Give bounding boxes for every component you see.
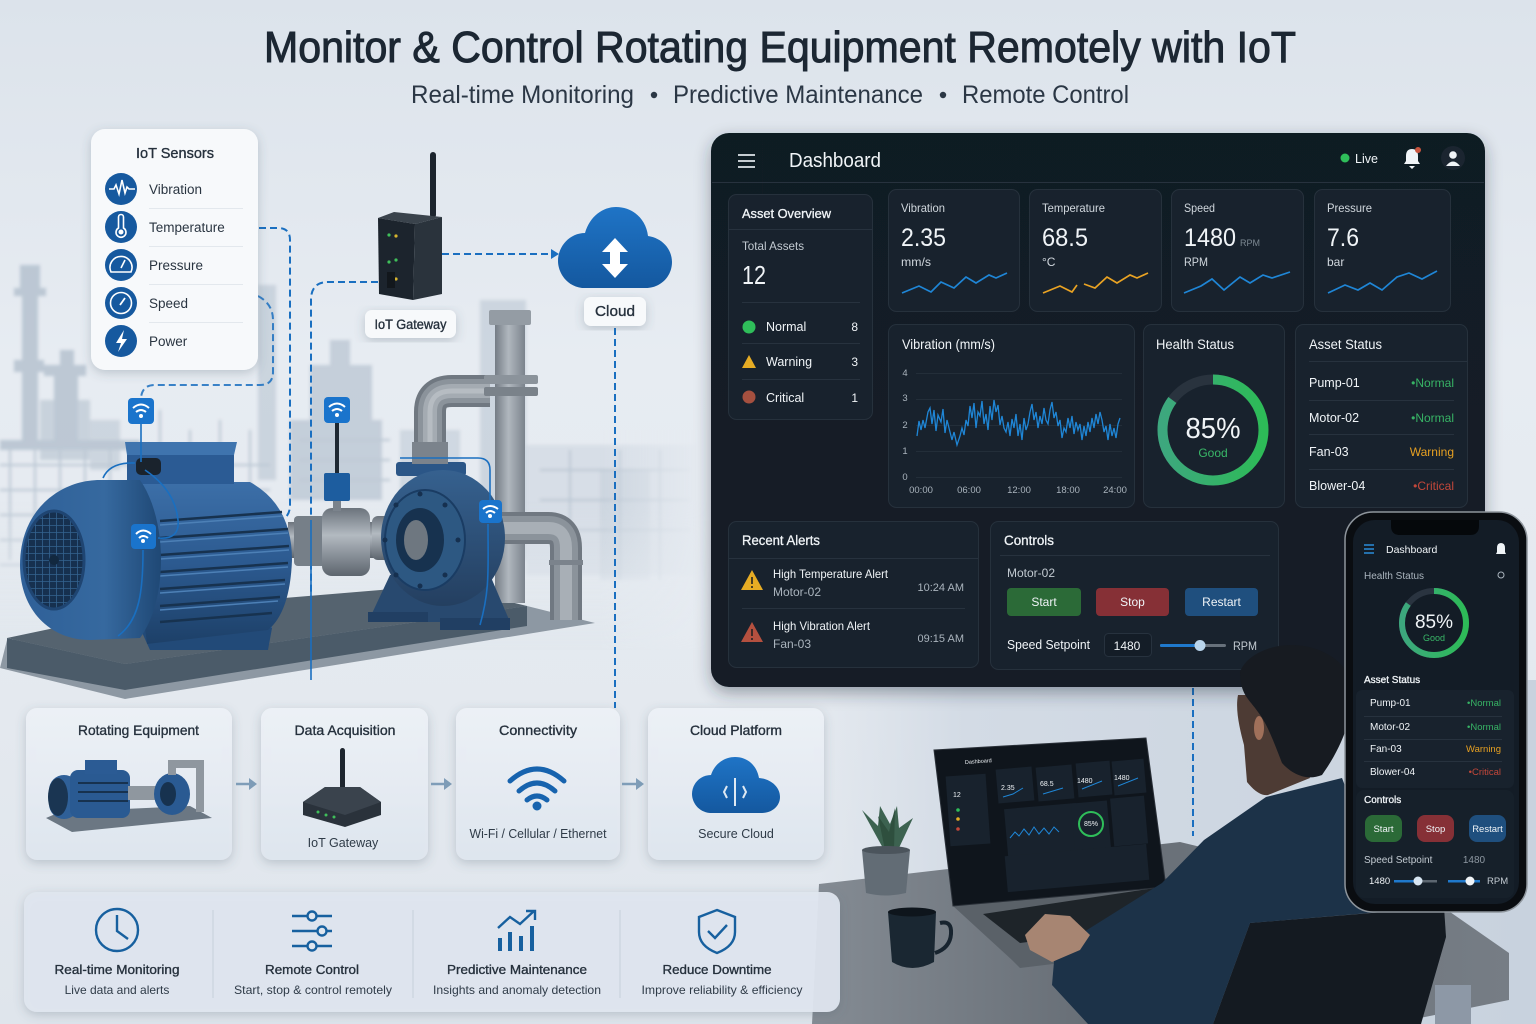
button: stop bbox=[1096, 588, 1169, 616]
phone controls: Speed Setpoint bbox=[1364, 855, 1433, 866]
card: asset overview: Asset Overview bbox=[742, 207, 832, 221]
metric card: vibration bbox=[888, 190, 1020, 312]
laptop screen dashboard bbox=[946, 758, 1149, 892]
button: restart: Restart bbox=[1202, 595, 1242, 609]
plant bbox=[862, 806, 913, 896]
metric card: speed: Speed bbox=[1184, 201, 1215, 215]
panel: benefits bbox=[24, 892, 840, 1012]
centrifugal pump bbox=[368, 442, 510, 630]
chair bbox=[1213, 907, 1446, 1024]
metric card: temperature bbox=[1030, 190, 1162, 312]
phone header: Dashboard bbox=[1386, 544, 1438, 556]
benefit: real-time monitoring: Real-time Monitoring bbox=[54, 962, 180, 977]
card: asset status: •Normal bbox=[1411, 376, 1454, 390]
label: cloud bbox=[584, 297, 646, 326]
title: Monitor & Control Rotating Equipment Remotely with IoT bbox=[264, 23, 1296, 72]
card: health status gauge bbox=[1144, 324, 1284, 508]
hand bbox=[1025, 914, 1090, 962]
chart: vibration time series: 24:00 bbox=[1103, 485, 1127, 496]
chart: vibration time series: 3 bbox=[902, 393, 908, 404]
chart: vibration time series: 12:00 bbox=[1007, 485, 1031, 496]
face and neck bbox=[1237, 695, 1310, 795]
phone asset status: Fan-03 bbox=[1370, 744, 1402, 755]
label: IoT gateway bbox=[365, 310, 456, 338]
card: recent alerts: 09:15 AM bbox=[918, 633, 964, 645]
benefit: remote control bbox=[234, 912, 392, 997]
card: recent alerts: High Vibration Alert bbox=[773, 619, 871, 633]
card: recent alerts: High Temperature Alert bbox=[773, 567, 889, 581]
card: asset overview bbox=[728, 194, 872, 420]
phone bbox=[1345, 512, 1527, 912]
card: recent alerts: 10:24 AM bbox=[918, 582, 964, 594]
subtitle: Remote Control bbox=[962, 81, 1129, 109]
card: recent alerts: Motor-02 bbox=[773, 585, 821, 599]
desk bbox=[812, 842, 1509, 1024]
phone controls: Start bbox=[1373, 824, 1394, 835]
icon: IoT gateway device bbox=[378, 152, 442, 300]
desk scene bbox=[934, 645, 1446, 1024]
shirt bbox=[1052, 778, 1440, 1024]
chart: vibration time series: 4 bbox=[902, 368, 908, 379]
laptop screen dashboard: 2.35 bbox=[1001, 785, 1015, 792]
button: stop: Stop bbox=[1120, 595, 1145, 609]
card: controls: Motor-02 bbox=[1007, 566, 1055, 580]
phone controls: Controls bbox=[1364, 795, 1401, 806]
icon: wifi bbox=[510, 769, 564, 808]
sensor: power: Power bbox=[149, 334, 188, 349]
equipment: motor and pump assembly bbox=[0, 310, 595, 699]
laptop screen dashboard: Dashboard bbox=[965, 758, 992, 766]
dashboard header bbox=[712, 146, 1484, 182]
phone health gauge: Good bbox=[1423, 633, 1445, 643]
flow card: connectivity bbox=[456, 708, 620, 860]
flow card: cloud platform bbox=[648, 708, 824, 860]
button: start bbox=[1007, 588, 1081, 616]
sensor wiring bbox=[103, 422, 490, 680]
flow card: cloud platform: Cloud Platform bbox=[690, 722, 782, 738]
phone header bbox=[1364, 543, 1506, 556]
benefit: remote control: Remote Control bbox=[265, 962, 359, 977]
icon: mini motor pump bbox=[46, 760, 212, 832]
card: asset overview: Critical bbox=[766, 391, 804, 405]
flow card: data acquisition: IoT Gateway bbox=[308, 836, 379, 850]
card: asset status: Blower-04 bbox=[1309, 479, 1365, 493]
phone asset status: Motor-02 bbox=[1370, 722, 1410, 733]
benefit: reduce downtime: Reduce Downtime bbox=[662, 962, 772, 977]
card: controls: Controls bbox=[1004, 533, 1054, 548]
benefit: predictive maintenance bbox=[433, 911, 601, 997]
chart: vibration time series: 2 bbox=[902, 420, 908, 431]
metric card: pressure: bar bbox=[1327, 255, 1344, 269]
laptop bbox=[934, 738, 1170, 968]
label: cloud: Cloud bbox=[595, 303, 635, 320]
connectors: sensors to equipment and cloud bbox=[141, 228, 1345, 836]
benefit: reduce downtime: Improve reliability & efficiency bbox=[642, 983, 802, 997]
ear bbox=[1254, 716, 1264, 740]
card: health status gauge: Good bbox=[1198, 446, 1228, 460]
laptop screen dashboard: 85% bbox=[1084, 821, 1098, 828]
card: asset status: Warning bbox=[1410, 445, 1454, 459]
card: asset overview: 8 bbox=[851, 320, 858, 334]
chart: vibration time series bbox=[888, 324, 1134, 508]
card: asset overview: 12 bbox=[742, 260, 766, 290]
icon: secure cloud bbox=[692, 757, 780, 813]
button: start: Start bbox=[1031, 595, 1057, 609]
icon: router bbox=[303, 748, 381, 827]
shaft coupling bbox=[288, 508, 413, 576]
card: asset overview: Total Assets bbox=[742, 239, 804, 253]
phone health gauge: Health Status bbox=[1364, 571, 1424, 582]
chart: vibration time series: 1 bbox=[902, 446, 908, 457]
metric card: speed: 1480 bbox=[1184, 224, 1236, 252]
sensor: pressure bbox=[105, 249, 203, 281]
phone controls: Restart bbox=[1472, 824, 1503, 835]
icon: wifi sensor 2 bbox=[324, 397, 350, 423]
icon: cloud bbox=[558, 207, 672, 288]
phone health gauge bbox=[1364, 571, 1504, 655]
phone controls: Stop bbox=[1426, 824, 1445, 835]
chart: vibration time series: 00:00 bbox=[909, 485, 933, 496]
dashboard header: Dashboard bbox=[789, 150, 881, 172]
flow card: rotating equipment: Rotating Equipment bbox=[78, 722, 199, 738]
sensor: pressure: Pressure bbox=[149, 258, 203, 273]
phone asset status: •Normal bbox=[1467, 698, 1501, 709]
phone controls: 1480 bbox=[1369, 876, 1390, 887]
laptop screen dashboard: 1480 bbox=[1077, 778, 1093, 785]
flow card: rotating equipment bbox=[26, 708, 232, 860]
metric card: pressure: Pressure bbox=[1327, 201, 1372, 215]
chart: vibration time series: Vibration (mm/s) bbox=[902, 336, 995, 352]
chart: vibration time series: 06:00 bbox=[957, 485, 981, 496]
benefit: real-time monitoring: Live data and alerts bbox=[65, 983, 169, 997]
phone asset status: Warning bbox=[1466, 744, 1501, 755]
phone controls bbox=[1356, 790, 1514, 898]
metric card: pressure bbox=[1314, 190, 1450, 312]
sensor: vibration bbox=[105, 173, 202, 205]
arrow: connectivity to cloud bbox=[622, 778, 644, 790]
subtitle: Predictive Maintenance bbox=[673, 81, 923, 109]
card: asset overview: 3 bbox=[851, 355, 858, 369]
base plate bbox=[0, 585, 595, 699]
fog over refinery bbox=[0, 500, 820, 650]
card: asset status bbox=[1296, 324, 1468, 508]
dashboard header: Live bbox=[1355, 151, 1378, 166]
chart: vibration time series: 0 bbox=[902, 472, 908, 483]
laptop screen dashboard: 12 bbox=[953, 792, 961, 799]
laptop screen dashboard: 68.5 bbox=[1040, 781, 1054, 788]
phone controls: 1480 bbox=[1463, 855, 1486, 866]
arrow: equipment to acquisition bbox=[236, 778, 257, 790]
sensor: power bbox=[105, 325, 188, 357]
fog to the right of refinery bbox=[600, 430, 710, 650]
card: asset overview: Warning bbox=[766, 355, 812, 369]
laptop screen dashboard: 1480 bbox=[1114, 775, 1130, 782]
phone notch bbox=[1391, 520, 1479, 535]
card: controls: 1480 bbox=[1114, 639, 1141, 653]
card: asset status: Pump-01 bbox=[1309, 376, 1360, 390]
metric card: speed bbox=[1172, 190, 1304, 312]
benefit: remote control: Start, stop & control remotely bbox=[234, 983, 392, 997]
card: asset overview: 1 bbox=[851, 391, 858, 405]
vibration probe bbox=[324, 420, 350, 511]
phone controls: RPM bbox=[1487, 876, 1508, 887]
icon: wifi sensor 4 bbox=[479, 500, 502, 523]
phone asset status: Pump-01 bbox=[1370, 698, 1411, 709]
label: IoT gateway: IoT Gateway bbox=[374, 317, 447, 332]
metric card: vibration: mm/s bbox=[901, 255, 931, 269]
flow card: data acquisition: Data Acquisition bbox=[294, 722, 396, 738]
metric card: temperature: °C bbox=[1042, 255, 1056, 269]
flow card: data acquisition bbox=[261, 708, 428, 860]
card: controls: Speed Setpoint bbox=[1007, 637, 1090, 652]
card: health status gauge: 85% bbox=[1186, 413, 1240, 445]
flow card: cloud platform: Secure Cloud bbox=[698, 827, 774, 841]
panel: IoT sensors: IoT Sensors bbox=[136, 145, 214, 162]
benefit: reduce downtime bbox=[642, 910, 802, 997]
mug bbox=[888, 908, 951, 968]
card: health status gauge: Health Status bbox=[1156, 337, 1234, 352]
metric card: temperature: 68.5 bbox=[1042, 224, 1088, 252]
metric card: temperature: Temperature bbox=[1042, 201, 1105, 215]
discharge pipework bbox=[430, 310, 583, 620]
card: asset status: •Critical bbox=[1413, 479, 1454, 493]
icon: wifi sensor 3 bbox=[131, 524, 156, 549]
card: asset overview: Normal bbox=[766, 320, 806, 334]
card: asset status: Fan-03 bbox=[1309, 445, 1349, 459]
hair bbox=[1240, 645, 1353, 777]
flow card: connectivity: Connectivity bbox=[499, 722, 577, 738]
card: recent alerts: Recent Alerts bbox=[742, 533, 820, 548]
sensor: speed: Speed bbox=[149, 296, 188, 311]
benefit: predictive maintenance: Insights and anomaly detection bbox=[433, 983, 601, 997]
card: asset status: Asset Status bbox=[1309, 337, 1382, 352]
phone asset status: •Critical bbox=[1469, 767, 1501, 778]
sensor: speed bbox=[105, 287, 188, 319]
desk leg bbox=[1435, 985, 1471, 1024]
metric card: vibration: 2.35 bbox=[901, 224, 946, 252]
sensor: temperature bbox=[105, 211, 225, 243]
phone asset status bbox=[1356, 675, 1514, 788]
subtitle: Real-time Monitoring bbox=[411, 81, 634, 109]
panel: dashboard bbox=[711, 133, 1485, 687]
arrow: acquisition to connectivity bbox=[431, 778, 452, 790]
phone asset status: •Normal bbox=[1467, 722, 1501, 733]
electric motor bbox=[20, 442, 292, 650]
metric card: speed: RPM bbox=[1184, 255, 1208, 269]
panel: IoT sensors bbox=[91, 129, 258, 370]
card: asset status: Motor-02 bbox=[1309, 411, 1359, 425]
phone asset status: Blower-04 bbox=[1370, 767, 1415, 778]
sensor: vibration: Vibration bbox=[149, 182, 202, 197]
card: controls: RPM bbox=[1233, 639, 1257, 653]
benefit: predictive maintenance: Predictive Maintenance bbox=[447, 962, 587, 977]
subtitle bbox=[411, 81, 1129, 109]
button: restart bbox=[1185, 588, 1258, 616]
card: asset status: •Normal bbox=[1411, 411, 1454, 425]
benefit: real-time monitoring bbox=[54, 909, 180, 997]
icon: wifi sensor 1 bbox=[128, 398, 154, 424]
card: recent alerts: Fan-03 bbox=[773, 637, 811, 651]
metric card: pressure: 7.6 bbox=[1327, 224, 1359, 252]
person bbox=[1025, 645, 1446, 1024]
chart: vibration time series: 18:00 bbox=[1056, 485, 1080, 496]
phone asset status: Asset Status bbox=[1364, 675, 1420, 686]
metric card: speed: RPM bbox=[1240, 238, 1260, 248]
background refinery silhouettes bbox=[0, 265, 696, 580]
sensor: temperature: Temperature bbox=[149, 220, 225, 235]
metric card: vibration: Vibration bbox=[901, 201, 945, 215]
phone health gauge: 85% bbox=[1415, 612, 1453, 633]
flow card: connectivity: Wi-Fi / Cellular / Ethernet bbox=[470, 827, 607, 841]
card: controls bbox=[990, 522, 1278, 670]
card: recent alerts bbox=[728, 522, 978, 668]
